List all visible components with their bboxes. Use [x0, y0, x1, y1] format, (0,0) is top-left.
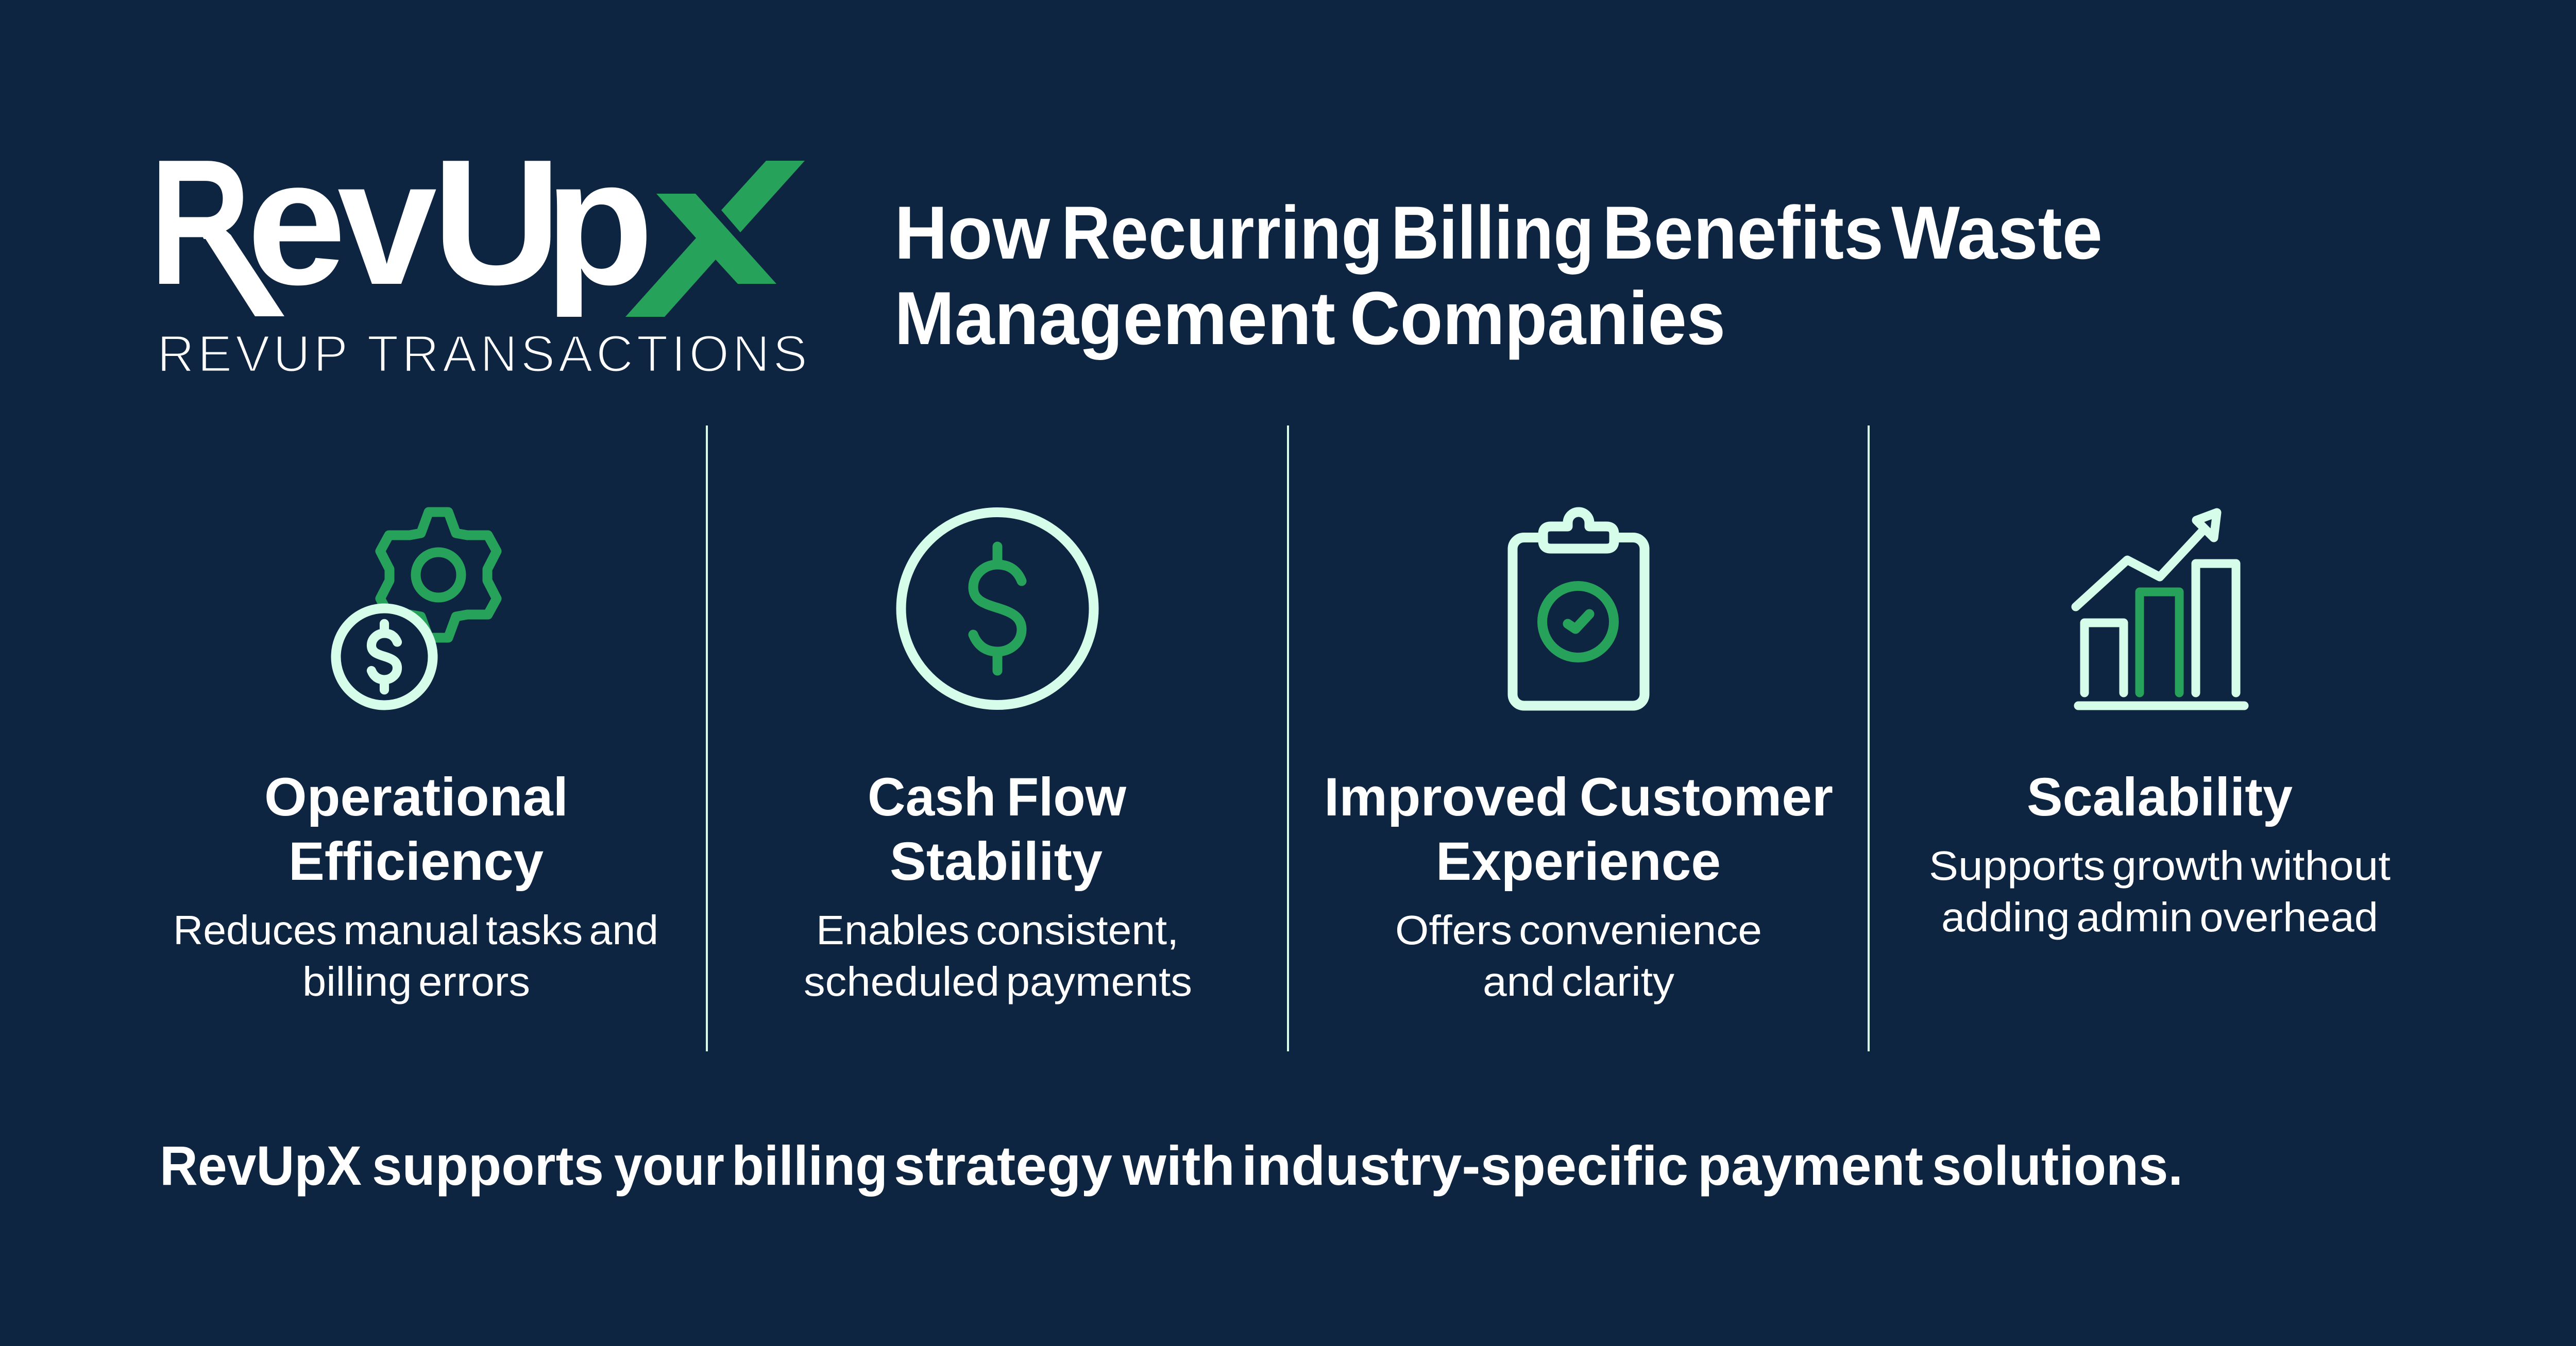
description: operational efficiency: billing errors	[302, 959, 530, 1004]
footer statement: your	[614, 1134, 724, 1197]
heading: scalability: Scalability	[2027, 767, 2293, 827]
column dividers	[707, 425, 1869, 1051]
logo: RevUpX	[150, 122, 807, 383]
icon: dollar circle	[901, 512, 1094, 705]
panel: operational efficiency	[173, 512, 658, 1004]
footer statement: billing	[732, 1134, 888, 1197]
panel: scalability	[1929, 513, 2391, 940]
title: How	[894, 191, 1050, 275]
description: scalability	[1929, 843, 2391, 940]
logo R leg	[206, 227, 284, 316]
description: scalability: adding admin overhead	[1941, 894, 2378, 940]
footer statement: supports	[372, 1134, 604, 1197]
panel: improved customer experience	[1324, 512, 1833, 1004]
heading: improved customer experience: Improved Customer	[1324, 767, 1833, 827]
footer statement: RevUpX	[160, 1134, 362, 1197]
title: Billing	[1391, 191, 1594, 275]
footer statement: with	[1122, 1134, 1235, 1197]
icon: gear with dollar coin	[336, 512, 497, 705]
heading: operational efficiency: Efficiency	[289, 831, 544, 892]
footer statement	[160, 1134, 2183, 1197]
heading: cash flow stability	[868, 767, 1126, 892]
description: improved customer experience: Offers convenience	[1395, 907, 1762, 953]
title: Recurring	[1061, 191, 1383, 275]
description: improved customer experience: and clarity	[1483, 959, 1674, 1004]
title	[894, 191, 2103, 360]
heading: improved customer experience	[1324, 767, 1833, 892]
description: improved customer experience	[1395, 907, 1762, 1004]
heading: cash flow stability: Stability	[890, 831, 1103, 892]
heading: operational efficiency: Operational	[264, 767, 568, 827]
description: operational efficiency: Reduces manual tasks and	[173, 907, 658, 953]
title: Benefits	[1602, 191, 1884, 275]
heading: operational efficiency	[264, 767, 568, 892]
footer statement: industry-specific	[1242, 1134, 1688, 1197]
logo X mark	[625, 161, 805, 317]
footer statement: solutions.	[1932, 1134, 2183, 1197]
description: cash flow stability: scheduled payments	[804, 959, 1192, 1004]
icon: growth bar chart with arrow	[2076, 513, 2244, 706]
title: Management	[894, 276, 1335, 360]
logo wordmark R: R	[150, 122, 250, 322]
description: operational efficiency	[173, 907, 658, 1004]
footer statement: strategy	[894, 1134, 1112, 1197]
panel: cash flow stability	[804, 512, 1192, 1004]
icon: clipboard with check	[1513, 512, 1645, 706]
description: scalability: Supports growth without	[1929, 843, 2391, 889]
logo tagline: REVUP TRANSACTIONS	[157, 325, 807, 383]
heading: cash flow stability: Cash Flow	[868, 767, 1126, 827]
title: Companies	[1350, 276, 1725, 360]
heading: improved customer experience: Experience	[1436, 831, 1721, 892]
title: Waste	[1891, 191, 2103, 275]
logo wordmark evUp: evUp	[247, 122, 654, 323]
description: cash flow stability: Enables consistent,	[816, 907, 1179, 953]
footer statement: payment	[1698, 1134, 1923, 1197]
description: cash flow stability	[804, 907, 1192, 1004]
